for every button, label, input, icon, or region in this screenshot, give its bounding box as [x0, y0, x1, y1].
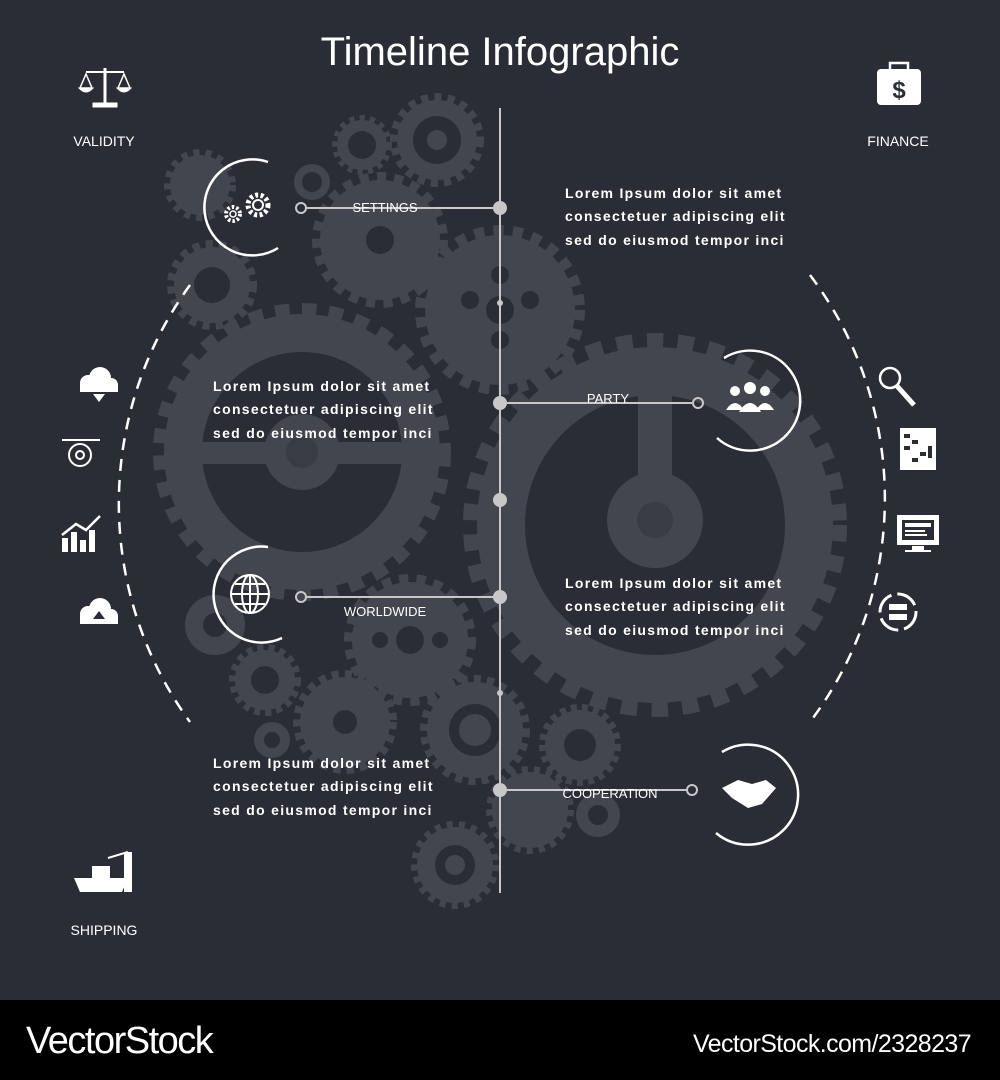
gear: big right [475, 345, 835, 705]
label: validity: VALIDITY [73, 133, 135, 149]
title: Timeline Infographic [321, 30, 679, 74]
icon: handshake [722, 780, 776, 808]
icon: finance case: $ [892, 77, 906, 104]
icon: magnifier [880, 368, 914, 405]
icon: shipping [74, 852, 132, 892]
label: shipping: SHIPPING [71, 922, 137, 938]
icon: cloud download [80, 367, 118, 402]
node: worldwide: WORLDWIDE [344, 604, 426, 619]
left icons [62, 367, 118, 624]
text block 2: consectetuer adipiscing elit [213, 401, 434, 417]
text block 1: Lorem Ipsum dolor sit amet [565, 185, 782, 201]
icon: growth chart [62, 516, 100, 552]
text block 4: sed do eiusmod tempor inci [213, 802, 433, 818]
icon: cloud upload [80, 598, 118, 624]
label: finance: FINANCE [867, 133, 929, 149]
icon: people [726, 382, 774, 412]
text block 3: consectetuer adipiscing elit [565, 598, 786, 614]
dashed arc left [119, 285, 190, 722]
footer bar: VectorStock [26, 1020, 215, 1062]
icon: monitor [897, 515, 939, 552]
gear: big left [164, 314, 440, 590]
text block 1 [565, 185, 786, 248]
node: settings: SETTINGS [352, 200, 418, 215]
footer bar: VectorStock.com/2328237 [693, 1030, 971, 1058]
text block 2: sed do eiusmod tempor inci [213, 425, 433, 441]
text block 2 [213, 378, 434, 441]
node: settings [204, 159, 493, 255]
gear: top center [422, 232, 578, 388]
icon: disk tool [62, 440, 100, 466]
icon: gears [226, 195, 268, 221]
icon: spreadsheet [900, 428, 936, 470]
node: party [507, 351, 800, 451]
icon: validity scales [79, 68, 131, 107]
text block 2: Lorem Ipsum dolor sit amet [213, 378, 430, 394]
dashed arc right [810, 275, 885, 722]
background gears [164, 98, 835, 905]
node: worldwide [214, 547, 493, 643]
text block 3: sed do eiusmod tempor inci [565, 622, 785, 638]
text block 1: sed do eiusmod tempor inci [565, 232, 785, 248]
text block 1: consectetuer adipiscing elit [565, 208, 786, 224]
icon: globe [231, 575, 269, 613]
right icons [880, 368, 939, 630]
text block 4: consectetuer adipiscing elit [213, 778, 434, 794]
text block 4 [213, 755, 434, 818]
node: party: PARTY [587, 391, 629, 406]
icon: exchange [880, 594, 916, 630]
footer bar [0, 1000, 1000, 1080]
node: cooperation: COOPERATION [562, 786, 658, 801]
text block 3: Lorem Ipsum dolor sit amet [565, 575, 782, 591]
text block 4: Lorem Ipsum dolor sit amet [213, 755, 430, 771]
text block 3 [565, 575, 786, 638]
timeline axis [493, 108, 507, 893]
node: cooperation [507, 745, 798, 845]
icon: finance case [877, 63, 921, 105]
